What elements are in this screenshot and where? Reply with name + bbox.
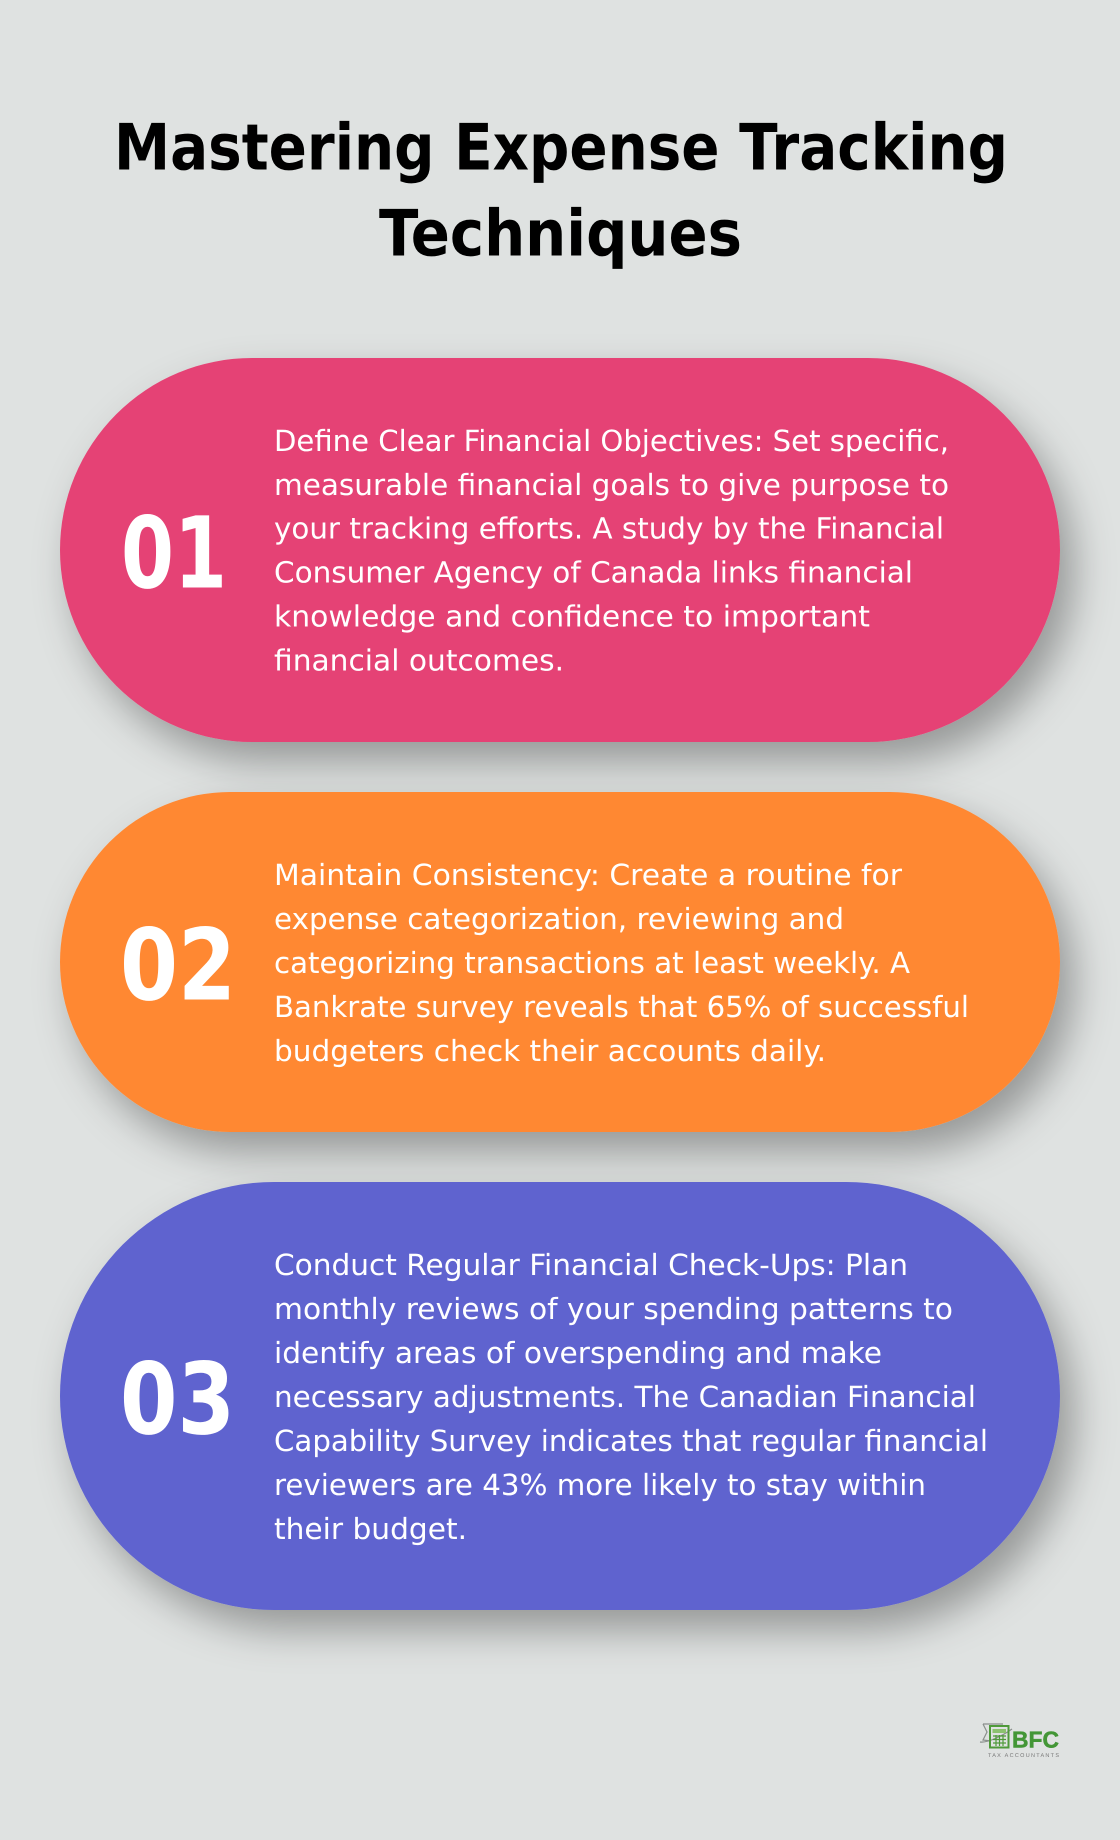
text: maintain consistency [274, 858, 969, 1068]
text: conduct regular financial check-ups: Capability Survey indicates that regular financial [274, 1424, 988, 1458]
number 01: 01 [121, 496, 227, 612]
number 02: 02 [120, 908, 236, 1024]
text: define clear financial objectives: Define Clear Financial Objectives: Set specific, [274, 424, 949, 458]
text: conduct regular financial check-ups: Conduct Regular Financial Check-Ups: Plan [274, 1248, 908, 1282]
pink pill background [60, 358, 1060, 742]
panel: step 01 [60, 358, 1060, 742]
icon: calculator [980, 1724, 1012, 1748]
text: define clear financial objectives [274, 424, 949, 678]
text: define clear financial objectives: Consumer Agency of Canada links financial [274, 556, 913, 590]
text: define clear financial objectives: financial outcomes. [274, 644, 564, 678]
text: conduct regular financial check-ups: their budget. [274, 1512, 467, 1546]
text: maintain consistency: Maintain Consistency: Create a routine for [274, 858, 902, 892]
text: maintain consistency: expense categorization, reviewing and [274, 902, 844, 936]
panel: step 03 [60, 1182, 1060, 1610]
text: conduct regular financial check-ups: necessary adjustments. The Canadian Financial [274, 1380, 976, 1414]
number 03: 03 [120, 1342, 235, 1458]
text: conduct regular financial check-ups: monthly reviews of your spending patterns to [274, 1292, 953, 1326]
text: conduct regular financial check-ups [274, 1248, 988, 1546]
text: define clear financial objectives: measurable financial goals to give purpose to [274, 468, 949, 502]
title [114, 112, 1008, 272]
text: define clear financial objectives: knowledge and confidence to important [274, 600, 870, 634]
orange pill background [60, 792, 1060, 1132]
logo tagline: TAX ACCOUNTANTS [988, 1753, 1059, 1759]
title: Mastering Expense Tracking [114, 112, 1008, 186]
logo wordmark: BFC [1012, 1726, 1059, 1752]
text: conduct regular financial check-ups: identify areas of overspending and make [274, 1336, 882, 1370]
purple pill background [60, 1182, 1060, 1610]
text: define clear financial objectives: your tracking efforts. A study by the Financial [274, 512, 944, 546]
text: maintain consistency: categorizing transactions at least weekly. A [274, 946, 910, 980]
logo: BFC Tax Accountants [980, 1724, 1059, 1759]
text: conduct regular financial check-ups: reviewers are 43% more likely to stay within [274, 1468, 926, 1502]
text: maintain consistency: budgeters check their accounts daily. [274, 1034, 826, 1068]
panel: step 02 [60, 792, 1060, 1132]
text: maintain consistency: Bankrate survey reveals that 65% of successful [274, 990, 969, 1024]
title: Techniques [379, 198, 742, 272]
